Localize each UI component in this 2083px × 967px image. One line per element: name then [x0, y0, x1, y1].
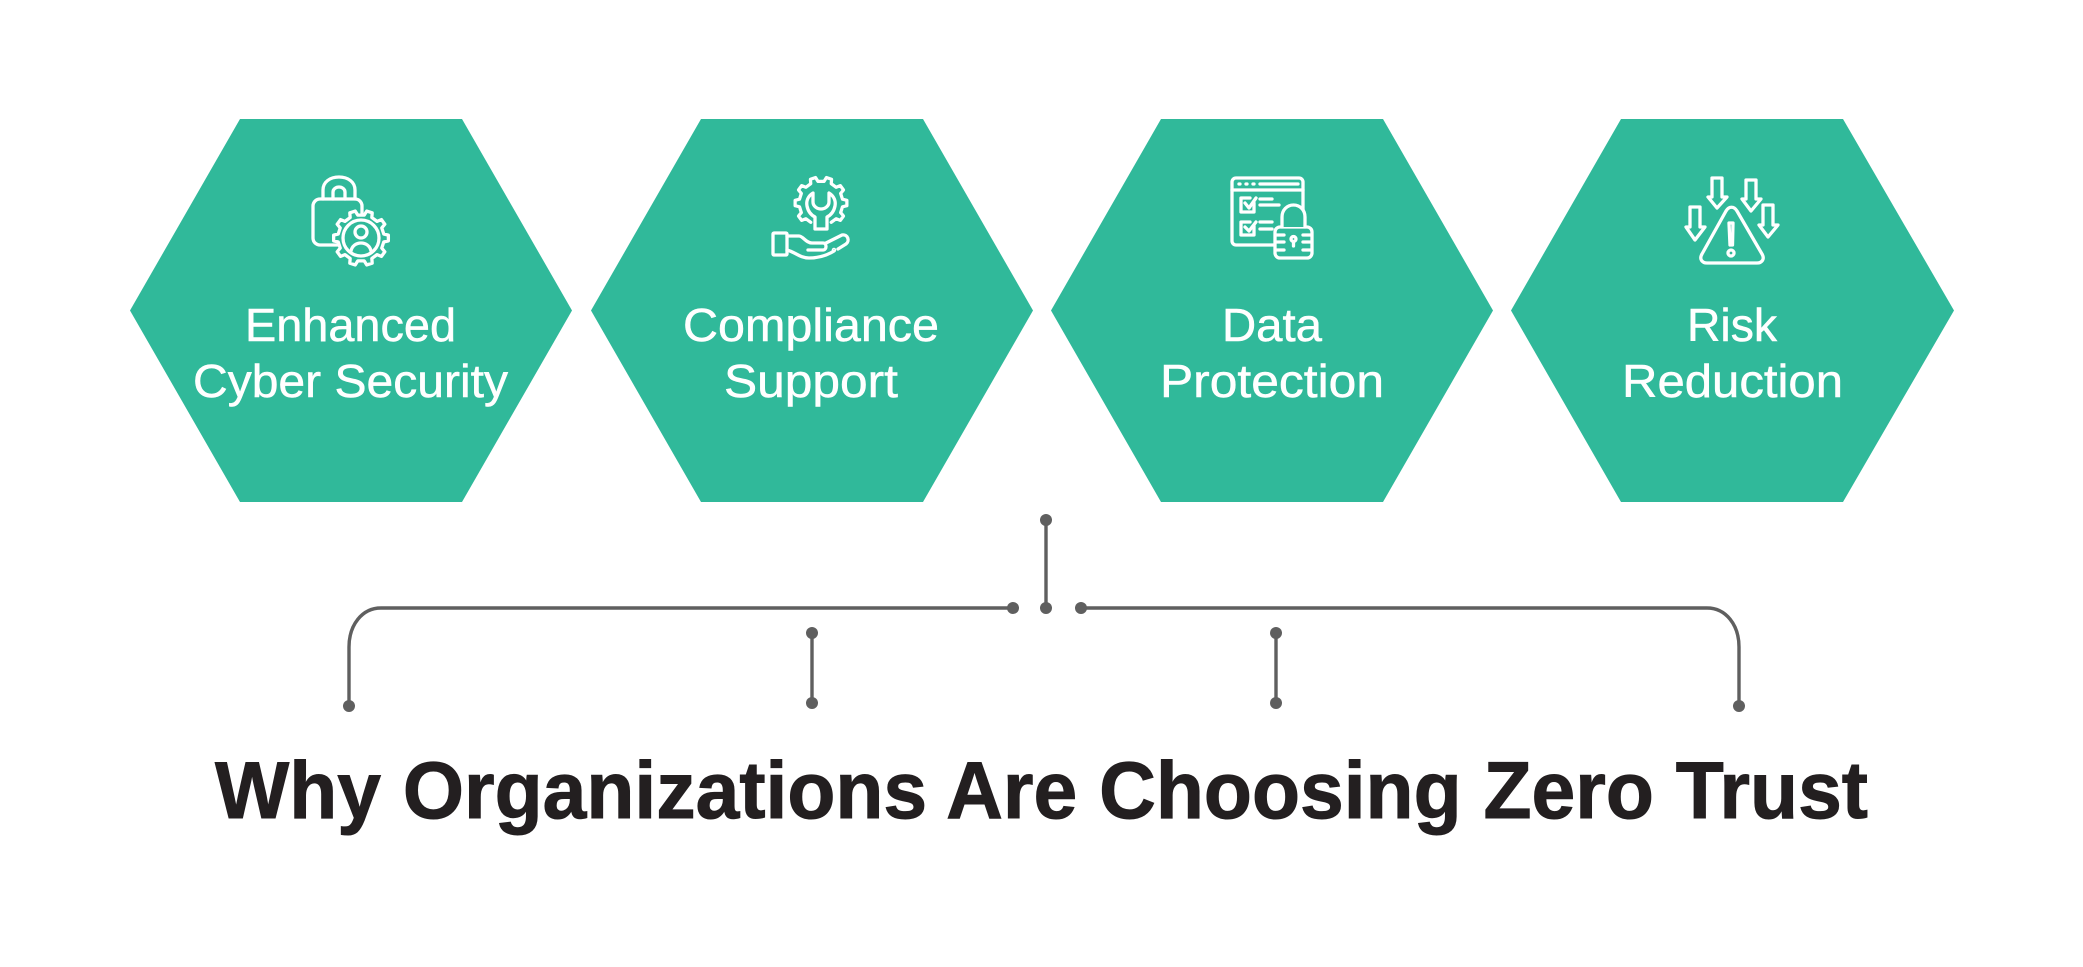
label: Enhanced Cyber Security: Enhanced: [245, 299, 456, 351]
hexagon: Data Protection: [1051, 119, 1493, 502]
connector: centre stem: [1040, 514, 1052, 614]
label: Enhanced Cyber Security: [193, 299, 508, 407]
label: Data Protection: [1160, 299, 1384, 407]
connector: left branch: [343, 602, 1019, 712]
hexagon: Risk Reduction: [1511, 119, 1954, 502]
connector: short stem right: [1270, 627, 1282, 709]
label: Data Protection: Data: [1222, 299, 1322, 351]
icon: hand holding wrench gear: [773, 178, 848, 258]
hexagon: Compliance Support: [591, 119, 1033, 502]
icon: lock with user gear: [313, 177, 388, 265]
label: Risk Reduction: Risk: [1687, 299, 1778, 351]
label: Enhanced Cyber Security: Cyber Security: [193, 355, 508, 407]
label: Compliance Support: [683, 299, 939, 407]
label: Risk Reduction: Reduction: [1622, 355, 1843, 407]
title: Why Organizations Are Choosing Zero Trust: [215, 746, 1868, 836]
connector: bracket linking title to hexagons: [343, 514, 1745, 712]
label: Data Protection: Protection: [1160, 355, 1384, 407]
icon: warning triangle with down arrows: [1686, 178, 1778, 263]
icon: checklist window with padlock: [1232, 178, 1312, 258]
panel: Risk Reduction: [1511, 119, 1954, 502]
hexagon: Enhanced Cyber Security: [130, 119, 572, 502]
panel: Enhanced Cyber Security: [130, 119, 572, 502]
connector: short stem left: [806, 627, 818, 709]
connector: right branch: [1075, 602, 1745, 712]
panel: Data Protection: [1051, 119, 1493, 502]
label: Compliance Support: Support: [724, 355, 898, 407]
panel: Compliance Support: [591, 119, 1033, 502]
label: Compliance Support: Compliance: [683, 299, 939, 351]
label: Risk Reduction: [1622, 299, 1843, 407]
